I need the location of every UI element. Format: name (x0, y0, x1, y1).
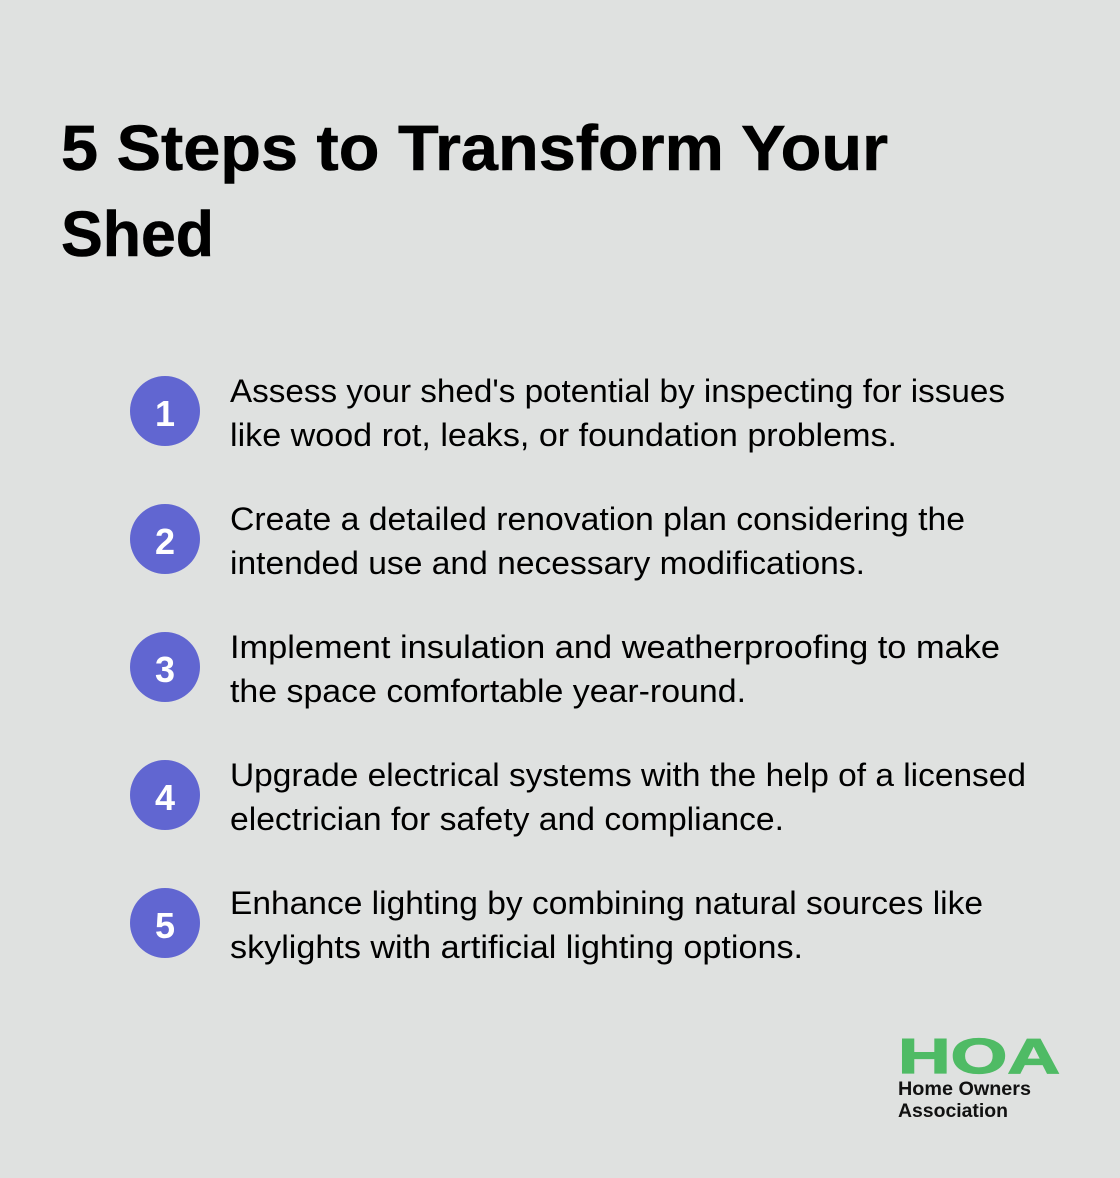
step 4 number badge (130, 760, 200, 830)
step 5 text (230, 885, 983, 965)
step 1 text: Assess your shed's potential by inspecting for issues (230, 373, 1005, 409)
step 4 number badge: 4 (155, 777, 175, 818)
logo: Home Owners Association (898, 1030, 1060, 1122)
step 2 (130, 501, 965, 581)
step 1 number badge: 1 (155, 393, 175, 434)
step 2 text: Create a detailed renovation plan considering the (230, 501, 965, 537)
logo: Home Owners Association: Association (898, 1101, 1008, 1122)
step 5 (130, 885, 983, 965)
step 1 (130, 373, 1005, 453)
step 3 text (230, 629, 1000, 709)
step 1 number badge (130, 376, 200, 446)
title: 5 Steps to Transform Your (61, 112, 888, 184)
step 3 number badge: 3 (155, 649, 175, 690)
step 4 text (230, 757, 1026, 837)
step 3 text: the space comfortable year-round. (230, 673, 746, 709)
logo: Home Owners Association: HOA (898, 1030, 1060, 1084)
step 3 (130, 629, 1000, 709)
step 4 text: Upgrade electrical systems with the help of a licensed (230, 757, 1026, 793)
step 2 text: intended use and necessary modifications. (230, 545, 865, 581)
title: Shed (61, 198, 214, 270)
step 3 number badge (130, 632, 200, 702)
step 4 (130, 757, 1026, 837)
step 5 number badge (130, 888, 200, 958)
step 2 text (230, 501, 965, 581)
step 2 number badge: 2 (155, 521, 175, 562)
step 5 text: Enhance lighting by combining natural sources like (230, 885, 983, 921)
step 1 text: like wood rot, leaks, or foundation problems. (230, 417, 897, 453)
step 3 text: Implement insulation and weatherproofing to make (230, 629, 1000, 665)
step 5 number badge: 5 (155, 905, 175, 946)
step 4 text: electrician for safety and compliance. (230, 801, 784, 837)
title (61, 112, 888, 270)
step 1 text (230, 373, 1005, 453)
logo: Home Owners Association: Home Owners (898, 1079, 1031, 1100)
step 2 number badge (130, 504, 200, 574)
step 5 text: skylights with artificial lighting options. (230, 929, 803, 965)
